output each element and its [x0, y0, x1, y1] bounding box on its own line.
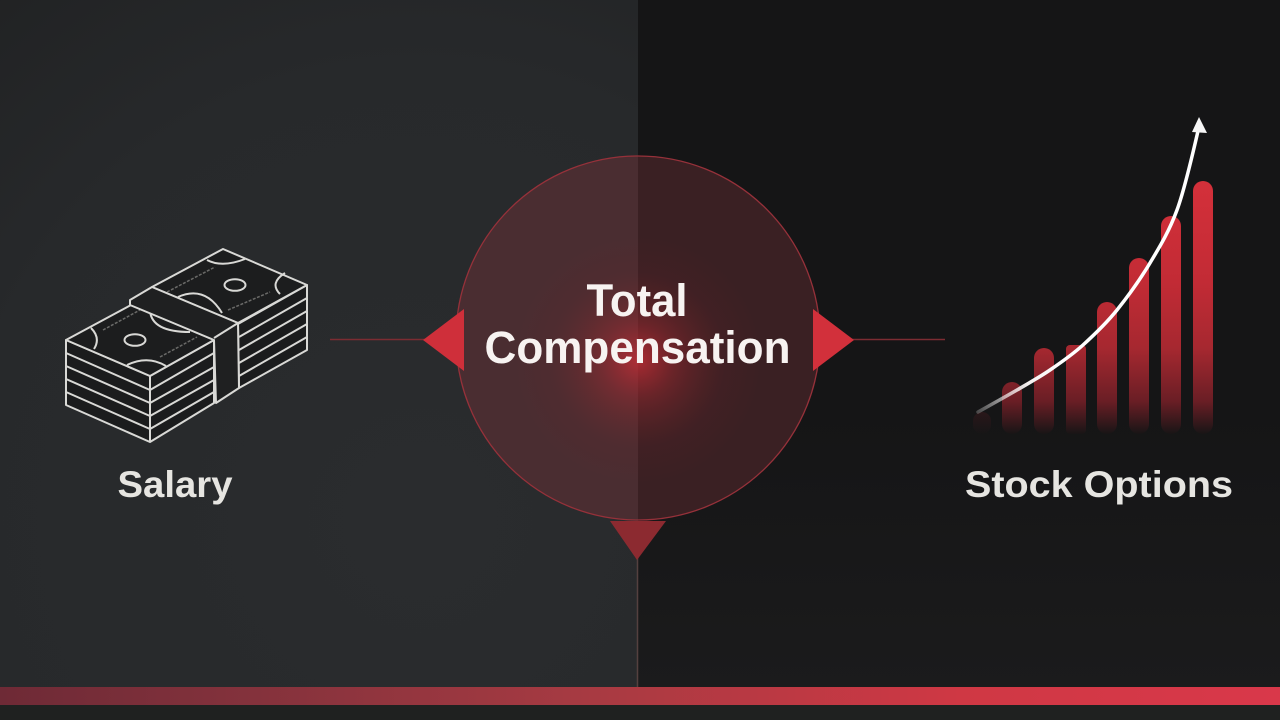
- circle left half: [458, 156, 638, 520]
- bar 1: [973, 412, 991, 434]
- label: Stock Options: Stock Options: [965, 464, 1233, 505]
- bar 3: [1034, 348, 1054, 434]
- curve line: [978, 131, 1198, 412]
- bar 8: [1193, 181, 1213, 434]
- bar 6: [1129, 258, 1149, 434]
- heading line 2: Compensation: [484, 322, 790, 373]
- arrowhead: [1192, 117, 1207, 133]
- circle red glow: [456, 156, 820, 520]
- arrow: right triangle: [813, 309, 854, 371]
- back note centre oval: [224, 279, 246, 291]
- front stack layer lines: [66, 353, 214, 429]
- front note top face: [66, 305, 214, 376]
- back stack layer lines: [239, 298, 307, 376]
- front note centre oval: [124, 334, 146, 346]
- back stack right side: [238, 285, 307, 388]
- bar 7: [1161, 216, 1181, 434]
- back note dashed detail: [167, 267, 270, 310]
- label: Salary: Salary: [118, 464, 233, 505]
- front stack side faces: [66, 340, 214, 442]
- heading: Total Compensation: [484, 275, 790, 373]
- band fold edge: [214, 323, 238, 338]
- arrow: left triangle: [423, 309, 464, 371]
- arrow: growth curve: [978, 117, 1207, 412]
- heading line 1: Total: [586, 275, 688, 326]
- bar 4: [1066, 345, 1086, 434]
- icon: stack of banknotes: [66, 249, 307, 442]
- paper band: [130, 287, 239, 403]
- front stack centre edge: [149, 376, 151, 442]
- chart: rising stock bars: [973, 181, 1213, 434]
- circle right half: [638, 156, 818, 520]
- footer strip: [0, 705, 1280, 720]
- front note engravings: [91, 311, 190, 366]
- arrow: bottom triangle: [610, 521, 666, 560]
- panel: left background: [0, 0, 638, 688]
- bar 5: [1097, 302, 1117, 434]
- central circle: [456, 156, 820, 520]
- back note big arc: [178, 293, 222, 313]
- footer red gradient bar: [0, 687, 1280, 705]
- connector: vertical line below circle: [636, 558, 638, 687]
- back note top face: [152, 249, 307, 323]
- bar 2: [1002, 382, 1022, 434]
- circle outline: [456, 156, 820, 520]
- front note dashed detail: [103, 310, 197, 357]
- back note engravings: [207, 259, 285, 294]
- connector: salary to circle: [330, 338, 425, 340]
- connector: stock options to circle: [852, 338, 945, 340]
- panel: right background: [638, 0, 1280, 688]
